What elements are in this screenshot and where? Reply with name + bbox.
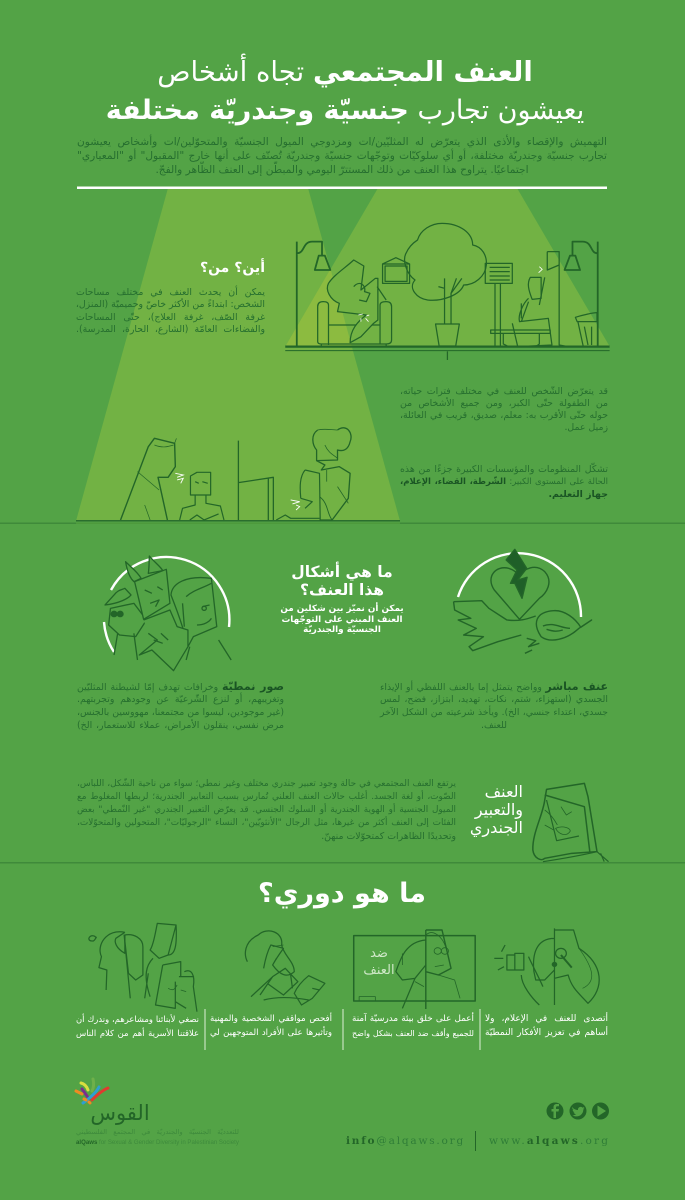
logo english tagline: alQaws for Sexual & Gender Diversity in Palestinian Society (76, 1139, 239, 1146)
direct violence text (380, 680, 608, 731)
gender expression text: الصّوت، أو لغة الجسد. أغلب حالات العنف العلني تُمارس بسبب التعابير الجندرية؛ لربطها المغلوط مع (77, 792, 456, 802)
institutions text: الحالة على المستوى الكبير: الشّرطة، القضاء، الإعلام، (400, 476, 608, 486)
my role heading: ما هو دوري؟ (258, 878, 426, 909)
caption 3: أفحص مواقفي الشخصية والمهنية (210, 1014, 332, 1024)
stereotypes text: وتغريبهم، أو لنزع الشّرعيّة عن وجودهم وتجربتهم. (77, 694, 284, 705)
caption 2 (352, 1012, 474, 1038)
life stages text: من الطفولة حتّى الكبر، ومن جميع الأشخاص من (400, 398, 608, 409)
intro text: تجارب جنسيّة وجندريّة مختلفة، أو أي سلوكيّات وتوجّهات جنسيّة وجندريّة تُصنّف على أنها خارج "المقبول" أو "المعياري" (77, 150, 607, 162)
life stages text: قد يتعرّض الشّخص للعنف في مختلف فترات حياته، (400, 386, 608, 397)
caption 1: أتصدى للعنف في الإعلام، ولا (485, 1014, 608, 1024)
where who text: الشخص: ابتداءً من الأكثر خاصّ وحميميّة (المنزل، (76, 299, 265, 310)
where who heading: أين؟ من؟ (200, 260, 265, 276)
intro text (77, 134, 607, 176)
forms subtitle (280, 602, 404, 635)
caption 1 (485, 1012, 608, 1038)
institutions text: جهاز التعليم. (548, 489, 608, 500)
caption 3: وتأثيرها على الأفراد المتوجهين لي (210, 1028, 332, 1038)
caption 4: علاقتنا الأسرية أهم من كلام الناس (76, 1028, 199, 1038)
direct violence text: الجسدي (استهزاء، شتم، نكات، تهديد، ابتزاز، فضح، لمس (380, 694, 608, 705)
caption 2: أعمل على خلق بيئة مدرسيّة آمنة (352, 1014, 474, 1024)
stereotypes text: (غير موجودين، ليسوا من مجتمعنا، مهووسين بالجنس، (77, 707, 284, 718)
caption 4: نصغي لأبنائنا ومشاعرهم، وندرك أن (76, 1014, 199, 1024)
logo tagline: للتعدديّة الجنسيّة والجندريّة في المجتمع الفلسطيني (76, 1128, 239, 1136)
caption 4 (76, 1014, 199, 1038)
where who text (76, 286, 265, 335)
title (106, 54, 584, 126)
contact website: www.alqaws.org (489, 1135, 610, 1147)
life stages text: زميل عمل. (564, 422, 608, 433)
gender expression text (77, 778, 456, 842)
caption 2: للجميع وأقف ضد العنف بشكل واضح (352, 1029, 474, 1038)
life stages text (400, 386, 608, 433)
icon: rainbow mark (74, 1078, 110, 1105)
forms heading: هذا العنف؟ (300, 581, 384, 599)
stereotypes text: صور نمطيّة وخرافات تهدف إمّا لشيطنة المثليّين (77, 680, 284, 693)
institutions text (400, 462, 608, 500)
forms subtitle: العنف المبني على التوجّهات (281, 614, 403, 624)
gender expression heading: العنف (485, 782, 523, 801)
caption 3 (210, 1012, 332, 1038)
where who text: غرفة الصّف، غرفة العلاج)، حتّى المساحات (76, 312, 265, 323)
institutions text: تشكّل المنظومات والمؤسسات الكبيرة جزءًا من هذه (400, 464, 608, 475)
direct violence text: للعنف. (481, 720, 507, 731)
gender expression heading: والتعبير (475, 800, 523, 819)
logo (74, 1078, 239, 1146)
gender expression heading (470, 782, 523, 837)
title: العنف المجتمعي تجاه أشخاص (157, 56, 533, 88)
gender expression text: الميول الجنسية أو الهوية الجندرية أو السلوك الجنسي. قد يعرّض التعبير الجندري "غير النّمطي" بعض (77, 805, 456, 815)
board handwriting (363, 946, 395, 978)
contact email: info@alqaws.org (346, 1135, 465, 1147)
gender expression text: الفئات إلى العنف أكثر من غيرها، مثل الرجال "الأنثويّين"، النساء "الرجوليّات"، المتحولين والمتحوّلات، (77, 818, 456, 828)
caption 1: أساهم في تعزيز الأفكار النمطيّة (485, 1028, 608, 1038)
gender expression text: يرتفع العنف المجتمعي في حالة وجود تعبير جندري مختلف وغير نمطي؛ سواء من ناحية الشّكل، اللباس، (77, 779, 456, 789)
direct violence text: عنف مباشر وواضح يتمثل إما بالعنف اللفظي أو الإيذاء (380, 680, 608, 693)
forms heading: ما هي أشكال (291, 563, 393, 581)
forms subtitle: الجنسيّة والجندريّة (303, 625, 381, 635)
title: يعيشون تجارب جنسيّة وجندريّة مختلفة (106, 95, 584, 126)
where who text: يمكن أن يحدث العنف في مختلف مساحات (76, 287, 265, 298)
direct violence text: جسدي، اعتداء جنسي، الخ). ويأخذ شرعيته من الشكل الآخر (380, 707, 608, 718)
forms heading (291, 562, 393, 599)
forms subtitle: يمكن أن نميّز بين شكلين من (280, 604, 404, 614)
logo wordmark: القوس (90, 1101, 150, 1125)
intro text: اجتماعيًا. يتراوح هذا العنف من ذلك المستترّ اليومي والمبطّن إلى العنف الظّاهر والفجّ. (155, 164, 529, 176)
life stages text: حوله حتّى الأقرب به: معلم، صديق، قريب في العائلة، (400, 410, 608, 421)
where who text: والفضاءات العامّة (الشارع، الحارة، المدرسة). (76, 324, 265, 335)
gender expression text: وتحديدًا الظاهرات كمتحوّلات منهنّ. (321, 831, 456, 842)
intro text: التهميش والإقصاء والأذى الذي يتعرّض له المثليّين/ات ومزدوجي الميول الجنسيّة والمتحوّلين/ات وأشخاص يعيشون (77, 136, 607, 148)
stereotypes text: مرض نفسي، ينقلون الأمراض، عملاء للاستعمار، الخ) (77, 720, 284, 731)
gender expression heading: الجندري (470, 818, 523, 837)
board handwriting: ضد (370, 946, 388, 961)
board handwriting: العنف (363, 963, 395, 978)
stereotypes text (77, 680, 284, 731)
